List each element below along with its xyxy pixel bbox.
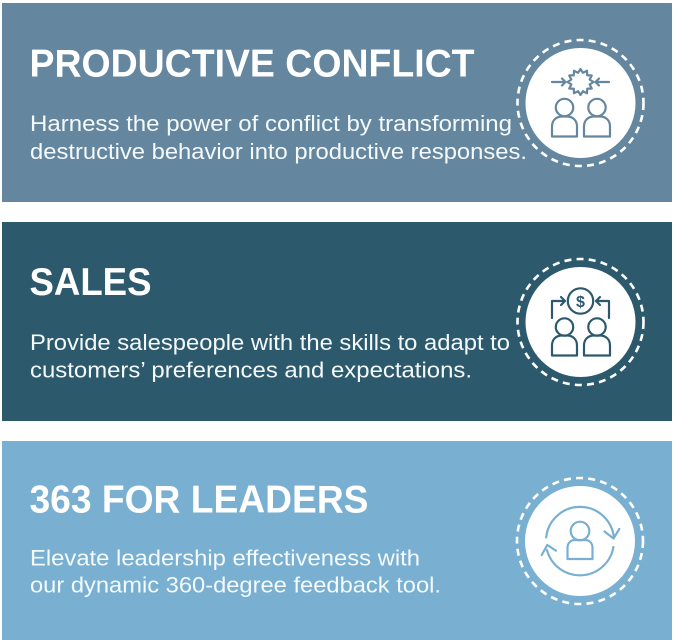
description: customers’ preferences and expectations. (30, 358, 472, 382)
description (30, 330, 510, 382)
heading: 363 FOR LEADERS (30, 478, 368, 522)
icon: two people in conflict (518, 40, 644, 166)
description (30, 546, 441, 598)
heading: PRODUCTIVE CONFLICT (30, 42, 475, 86)
panel background (2, 441, 672, 640)
panel background (2, 222, 672, 421)
icon: person in feedback loop (517, 478, 643, 604)
description: Provide salespeople with the skills to adapt to (30, 330, 510, 355)
description: our dynamic 360-degree feedback tool. (30, 572, 441, 598)
panel background (2, 3, 672, 202)
description (30, 111, 527, 164)
description: Elevate leadership effectiveness with (30, 546, 420, 570)
dollar sign: $ (576, 294, 585, 311)
panel: sales (2, 222, 672, 421)
description: Harness the power of conflict by transforming (30, 111, 512, 136)
icon: salespeople and customer with dollar coin (518, 259, 644, 385)
panel: 363 for leaders (2, 441, 672, 640)
heading: SALES (30, 261, 152, 304)
description: destructive behavior into productive responses. (30, 139, 527, 164)
panel: productive conflict (2, 3, 672, 202)
